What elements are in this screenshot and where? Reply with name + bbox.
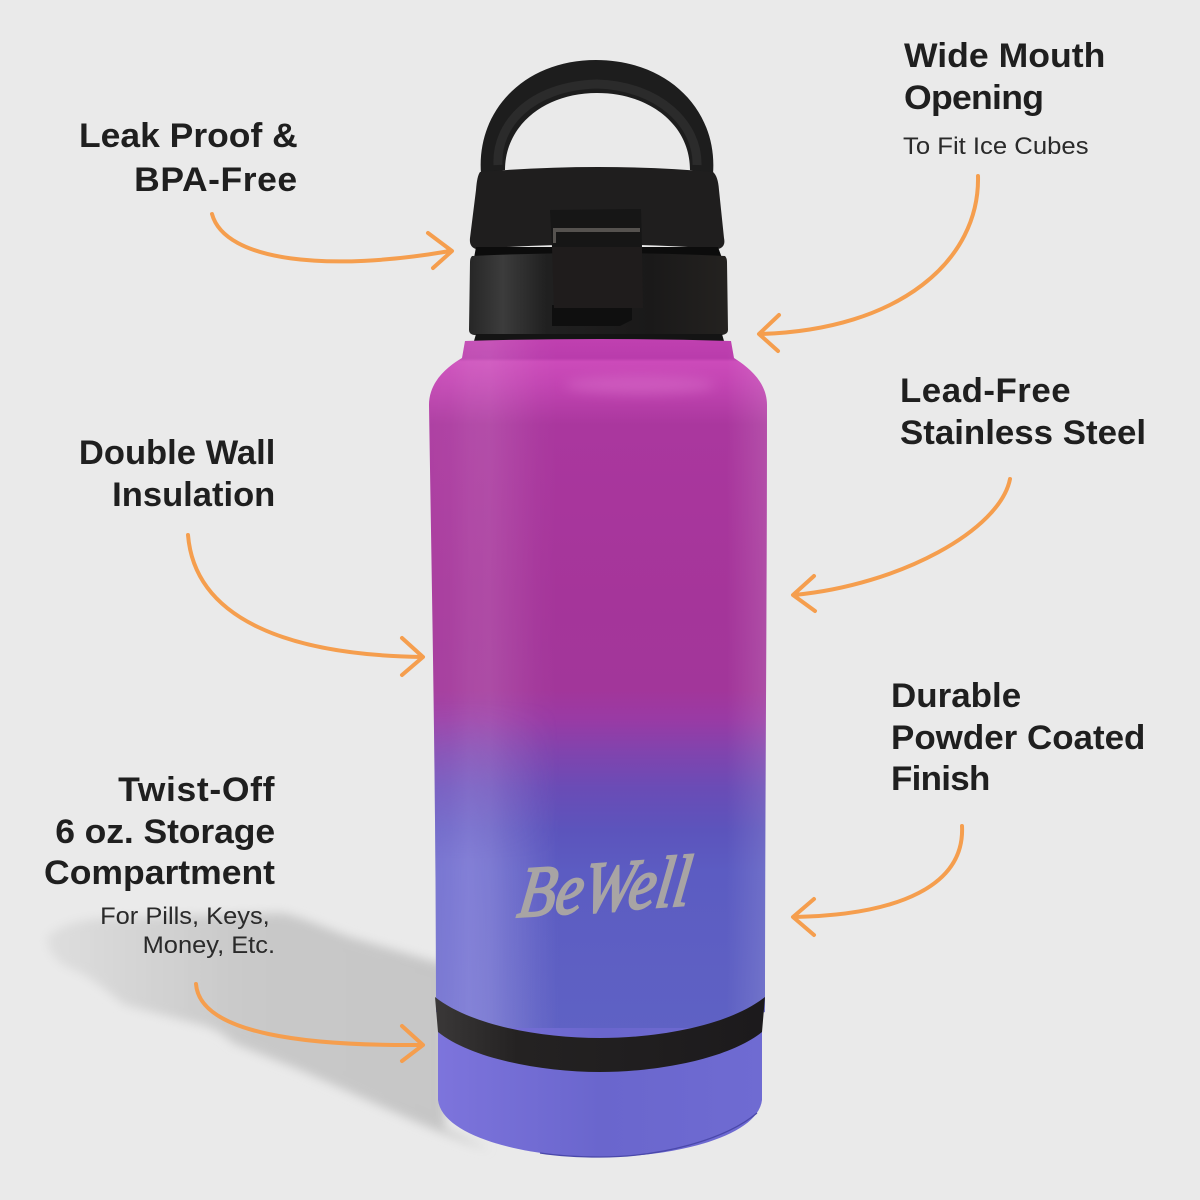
heading: leak proof: BPA-Free <box>134 161 298 199</box>
arrow: wide mouth <box>759 176 978 351</box>
arrow: stainless steel <box>793 479 1010 611</box>
text: to fit ice cubes: To Fit Ice Cubes <box>903 133 1089 160</box>
heading: powder coated: Durable <box>891 677 1021 715</box>
bottle <box>425 60 767 1157</box>
heading: stainless steel: Stainless Steel <box>900 414 1146 452</box>
text: for pills: For Pills, Keys, <box>100 903 270 930</box>
heading: storage <box>44 771 275 892</box>
base <box>438 1028 762 1157</box>
lid gap <box>474 247 722 258</box>
heading: leak proof: Leak Proof & <box>79 117 298 155</box>
latch highlight <box>553 228 640 243</box>
heading: stainless steel: Lead-Free <box>900 372 1071 410</box>
heading: storage: Compartment <box>44 854 275 892</box>
handle <box>481 60 713 174</box>
heading: leak proof <box>79 117 298 199</box>
heading: wide mouth: Opening <box>904 78 1043 116</box>
latch shadow <box>552 305 632 326</box>
black ring <box>435 997 765 1072</box>
heading: stainless steel <box>900 372 1146 452</box>
heading: double wall <box>79 434 275 514</box>
body highlight <box>429 339 767 1038</box>
heading: double wall: Insulation <box>112 476 275 514</box>
heading: wide mouth <box>904 37 1105 116</box>
heading: powder coated: Powder Coated <box>891 718 1145 756</box>
heading: storage: Twist-Off <box>118 771 275 809</box>
heading: storage: 6 oz. Storage <box>55 812 275 850</box>
arrow: powder coated <box>793 826 962 935</box>
arrow: double wall <box>188 535 423 675</box>
handle inner face <box>498 84 697 165</box>
lower highlight <box>434 747 525 1028</box>
latch lower <box>552 247 643 308</box>
neck shadow <box>474 334 724 341</box>
heading: powder coated: Finish <box>891 760 990 798</box>
arrow: storage <box>196 984 423 1061</box>
heading: wide mouth: Wide Mouth <box>904 37 1105 75</box>
text: for pills: Money, Etc. <box>143 932 275 959</box>
heading: powder coated <box>891 677 1145 798</box>
shadow <box>47 913 490 1150</box>
main body <box>429 339 767 1038</box>
heading: double wall: Double Wall <box>79 434 275 472</box>
arrow: leak proof <box>212 214 452 268</box>
logo: BeWell <box>514 840 697 933</box>
base edge <box>540 1113 757 1157</box>
latch <box>550 209 643 326</box>
lid top <box>470 167 724 249</box>
latch upper <box>550 209 642 247</box>
lid collar <box>469 253 728 338</box>
text: for pills <box>100 903 275 959</box>
shoulder glint <box>565 376 715 394</box>
